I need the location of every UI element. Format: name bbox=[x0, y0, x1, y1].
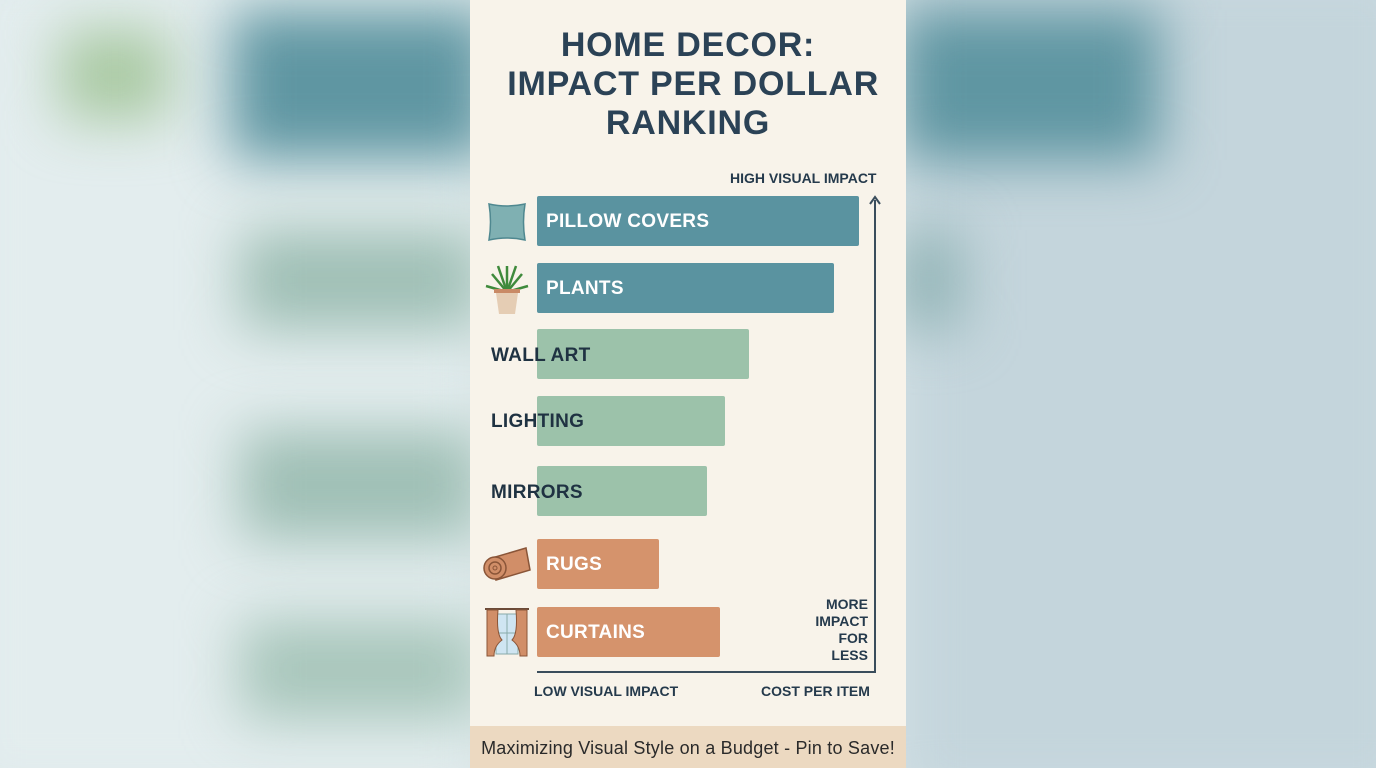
footer banner bbox=[470, 726, 906, 768]
callout: more impact for less: LESS bbox=[831, 647, 868, 663]
bar: plants bbox=[537, 263, 834, 313]
bar: lighting bbox=[537, 396, 725, 446]
footer banner: Maximizing Visual Style on a Budget - Pin to Save! bbox=[481, 738, 895, 758]
bar: rugs: RUGS bbox=[546, 554, 602, 575]
callout: more impact for less: FOR bbox=[838, 630, 868, 646]
bar: mirrors bbox=[537, 466, 707, 516]
bar: curtains bbox=[537, 607, 720, 657]
title: HOME DECOR: bbox=[561, 26, 815, 64]
icon: curtains bbox=[485, 608, 529, 656]
axis label: low visual impact: LOW VISUAL IMPACT bbox=[534, 683, 678, 699]
label: mirrors: MIRRORS bbox=[491, 482, 583, 503]
label: wall art: WALL ART bbox=[491, 345, 590, 366]
axis label: cost per item: COST PER ITEM bbox=[761, 683, 870, 699]
label: lighting: LIGHTING bbox=[491, 411, 584, 432]
bar: pillow covers: PILLOW COVERS bbox=[546, 211, 709, 232]
infographic card bbox=[470, 0, 906, 768]
bar: rugs bbox=[537, 539, 659, 589]
icon: rug bbox=[483, 547, 531, 581]
callout: more impact for less: MORE bbox=[826, 596, 868, 612]
title: IMPACT PER DOLLAR bbox=[507, 65, 879, 103]
axes bbox=[537, 195, 881, 673]
callout: more impact for less: IMPACT bbox=[815, 613, 868, 629]
title bbox=[507, 26, 879, 142]
bar: plants: PLANTS bbox=[546, 278, 624, 299]
title: RANKING bbox=[606, 104, 770, 142]
axis label: high visual impact: HIGH VISUAL IMPACT bbox=[730, 170, 876, 186]
bar: curtains: CURTAINS bbox=[546, 622, 645, 643]
icon: plant bbox=[486, 266, 528, 314]
callout: more impact for less bbox=[815, 596, 868, 663]
icon: pillow bbox=[488, 203, 526, 241]
bar: wall art bbox=[537, 329, 749, 379]
bar: pillow covers bbox=[537, 196, 859, 246]
